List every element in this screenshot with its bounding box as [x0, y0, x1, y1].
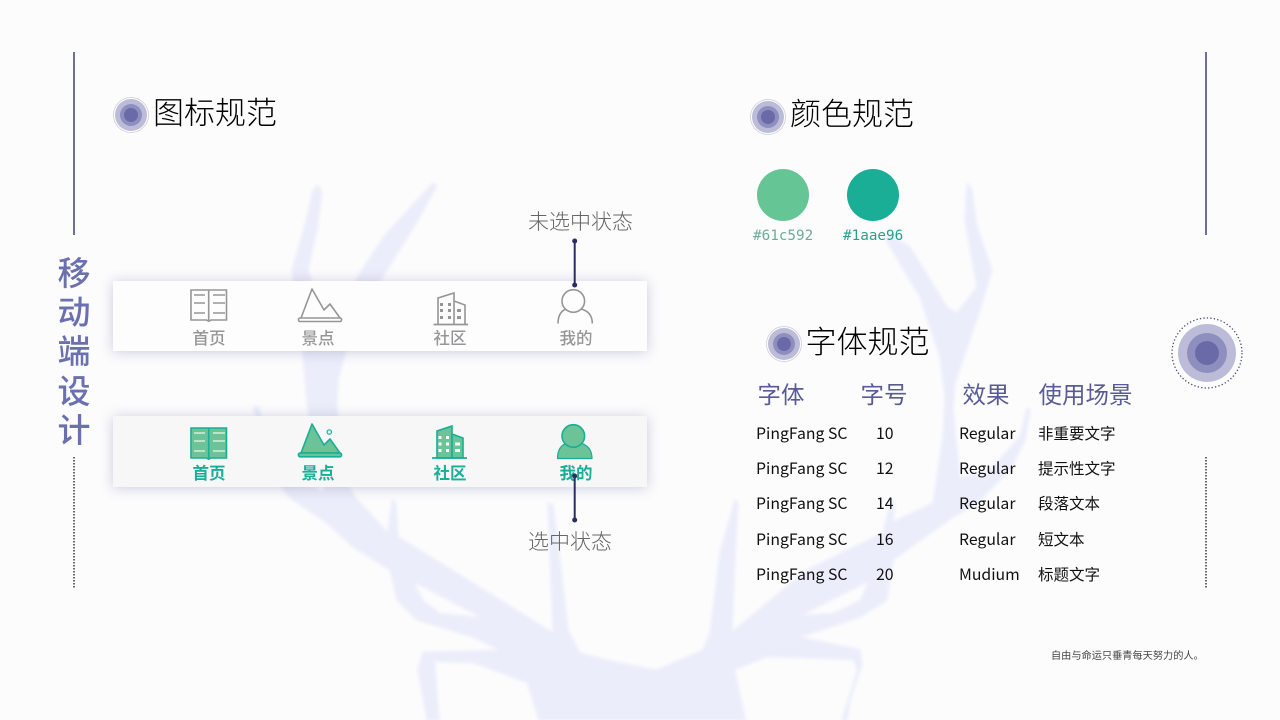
table row: size 16: 短文本 [1038, 528, 1085, 550]
connector: unselected callout [572, 238, 578, 288]
table: font specification [756, 376, 1132, 585]
column header: font: 字体 [758, 376, 804, 410]
tab label: community: 社区 [434, 325, 466, 349]
heading: colour spec: 颜色规范 [790, 89, 914, 134]
column header: effect: 效果 [962, 376, 1010, 410]
icon: decorative large concentric circle [1171, 317, 1243, 389]
footer slogan: 自由与命运只垂青每天努力的人。 [1051, 647, 1204, 662]
icon: book outline [190, 289, 228, 322]
icon: heading bullet, font section [766, 326, 802, 362]
heading: font spec: 字体规范 [806, 317, 930, 362]
table row: size 16: PingFang SC [756, 527, 847, 550]
table row: size 20: 20 [876, 562, 894, 585]
panel: unselected tab bar [113, 281, 647, 351]
icon: mountain filled [298, 423, 342, 458]
table row: size 20: 标题文字 [1038, 563, 1100, 585]
table row: size 20: PingFang SC [756, 562, 847, 585]
table row: size 12 [756, 456, 1116, 479]
left dotted divider [73, 457, 75, 588]
table row: size 14 [756, 491, 1100, 514]
table row: size 20: Mudium [959, 562, 1020, 585]
table row: size 16: Regular [959, 527, 1015, 550]
table row: size 14: 段落文本 [1038, 492, 1100, 514]
left solid divider [73, 52, 75, 235]
tab label: home: 首页 [192, 325, 226, 349]
right dotted divider [1205, 457, 1207, 588]
table row: size 20 [756, 562, 1100, 585]
table row: size 12: Regular [959, 456, 1015, 479]
column header: usage: 使用场景 [1038, 376, 1132, 410]
icon: building filled [432, 424, 467, 459]
table row: size 10: PingFang SC [756, 421, 847, 444]
table row: size 16: 16 [876, 527, 894, 550]
table row: size 10 [756, 421, 1116, 444]
table row: size 10: 非重要文字 [1038, 422, 1116, 444]
icon: person filled [556, 424, 593, 460]
icon: building outline [434, 292, 468, 326]
table row: size 12: 提示性文字 [1038, 457, 1116, 479]
tab label: community selected: 社区 [434, 460, 466, 484]
tab label: attractions: 景点 [302, 325, 334, 349]
icon: mountain outline [298, 288, 342, 322]
table row: size 14: Regular [959, 491, 1015, 514]
tab label: attractions selected: 景点 [302, 460, 334, 484]
icon: heading bullet, icons section [113, 97, 149, 133]
table row: size 16 [756, 527, 1085, 550]
table row: size 12: PingFang SC [756, 456, 847, 479]
tab label: me selected: 我的 [560, 460, 592, 484]
tab label: home selected: 首页 [192, 460, 226, 484]
swatch: teal [847, 169, 899, 221]
callout label: unselected: 未选中状态 [528, 206, 633, 236]
tab label: me: 我的 [560, 325, 592, 349]
vertical title: 移动端设计 [58, 247, 90, 452]
icon: person outline [557, 288, 594, 324]
connector: selected callout [572, 474, 578, 522]
table row: size 14: PingFang SC [756, 491, 847, 514]
column header: size: 字号 [860, 376, 908, 410]
table row: size 10: 10 [876, 421, 894, 444]
icon: book filled [190, 427, 228, 460]
panel: selected tab bar [113, 416, 647, 487]
table row: size 12: 12 [876, 456, 894, 479]
icon: heading bullet, colour section [750, 99, 786, 135]
right solid divider [1205, 52, 1207, 235]
table row: size 10: Regular [959, 421, 1015, 444]
callout label: selected: 选中状态 [528, 526, 612, 556]
heading: icon spec: 图标规范 [153, 88, 277, 133]
swatch label: teal: #1aae96 [843, 228, 903, 244]
table row: size 14: 14 [876, 491, 894, 514]
swatch label: light green: #61c592 [753, 228, 813, 244]
swatch: light green [757, 169, 809, 221]
